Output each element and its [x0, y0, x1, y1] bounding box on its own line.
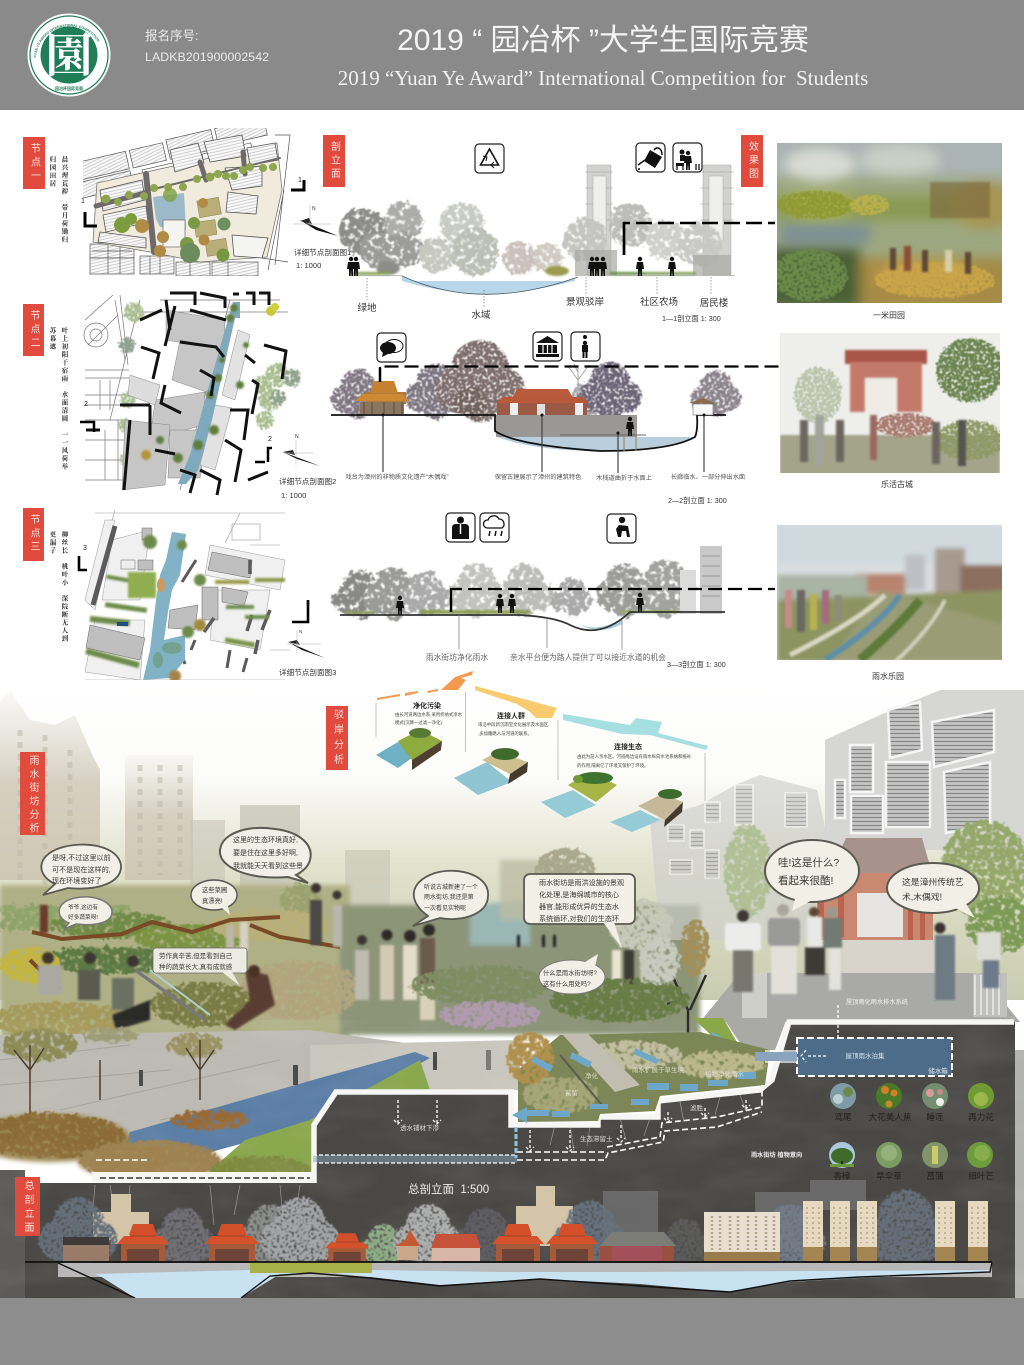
- plant: 菖蒲: [922, 1142, 948, 1168]
- dashed link: [451, 589, 775, 612]
- poem: node 1: 晨兴理荒秽 带月荷锄归: [60, 155, 70, 244]
- plant names: 睡莲: [926, 1111, 944, 1122]
- tan tower row: [803, 1201, 988, 1261]
- bubble 10: 这是漳州传统艺: [902, 876, 964, 887]
- left tree grove: [2, 1027, 223, 1120]
- crowd right: [725, 904, 1001, 1000]
- bubble 8: [539, 954, 605, 994]
- bare tree: [568, 364, 589, 395]
- labels: [357, 296, 729, 321]
- canal: [143, 532, 186, 680]
- block 4: [610, 789, 683, 832]
- right greenery: [724, 820, 1024, 953]
- icon: parent and child: [571, 332, 600, 361]
- tab: node 1: [23, 137, 45, 189]
- plant names: 大花美人蕉: [869, 1111, 912, 1122]
- pond: [153, 193, 186, 230]
- plant palette: [829, 1083, 994, 1168]
- plan caption 3: 详细节点剖面图3: [279, 667, 336, 677]
- headings: [413, 701, 642, 751]
- pavilion right: [689, 398, 716, 415]
- bubble 5: 种的蔬菜长大,真有成就感: [159, 962, 233, 971]
- bubble 4: 这些菜圃: [202, 885, 227, 894]
- plan caption 2: [279, 476, 336, 500]
- plan: node 3: [84, 510, 290, 682]
- black building lines: [86, 293, 286, 495]
- header band: [0, 0, 1024, 110]
- mid trees: [280, 848, 709, 976]
- icon: speech: [377, 333, 406, 362]
- bubble 9: 看起来很酷!: [778, 874, 833, 887]
- underground notes: 透水铺材下渗: [400, 1123, 440, 1132]
- temple A: [395, 1230, 420, 1260]
- caption: 乐活古城: [881, 479, 913, 489]
- underground notes: 生态滞留土: [580, 1134, 613, 1143]
- descriptions: 串沿中段新沉雨堂文化展示及水面区: [478, 721, 549, 728]
- bubble 1: 可不是现在这样的,: [52, 865, 111, 874]
- section 1-1: [339, 165, 775, 323]
- tab: renders: 效果图: [746, 140, 758, 182]
- section 3-3: [332, 546, 775, 669]
- descriptions: 由长河道两边水系,采用折纳式净水: [395, 711, 463, 718]
- poem: node 1: [48, 155, 70, 244]
- planting caption: 雨水街坊 植物意向: [751, 1151, 802, 1159]
- scale 1-1: 1—1剖立面 1: 300: [662, 314, 721, 323]
- cube building: [825, 690, 1024, 880]
- dark hall: [63, 1237, 109, 1261]
- underground notes: 滤胜: [690, 1103, 704, 1112]
- tab: total section: 总剖立面: [22, 1179, 34, 1236]
- plant names: 旱伞草: [876, 1170, 902, 1181]
- icon: competition logo: [28, 14, 110, 96]
- orange strip: [377, 671, 473, 700]
- block 2: [454, 748, 528, 795]
- roots: [92, 1095, 746, 1225]
- bubble 4: [191, 880, 237, 915]
- tab: section: 剖立面: [328, 140, 340, 182]
- registration number: LADKB201900002542: [145, 50, 269, 64]
- poem: node 3: 柳丝长 桃叶小 深院断无人到: [60, 530, 70, 643]
- descriptions: 模式(沉降一过滤一净化): [395, 719, 442, 726]
- grey roofs: [86, 528, 252, 660]
- foliage grey: [339, 202, 722, 276]
- water: [402, 276, 575, 294]
- cistern: 屋顶雨水泊集: [846, 1051, 885, 1060]
- bubble 6: 听说古城新建了一个: [424, 883, 478, 891]
- section markers 1: 1: [298, 177, 302, 184]
- ground and water profile: [25, 1262, 992, 1298]
- icon: competition logo: 园冶杯国际竞赛: [55, 85, 83, 91]
- water and ground: [578, 618, 622, 630]
- scale 3-3: 3—3剖立面 1: 300: [667, 660, 726, 669]
- caption: 一米田园: [873, 310, 905, 320]
- plant: 细叶芒: [967, 1142, 993, 1168]
- caption: 雨水乐园: [872, 671, 904, 681]
- plan caption 2: 详细节点剖面图2: [279, 476, 336, 486]
- descriptions: ,多加雕路人与河道的联系。: [478, 730, 532, 737]
- dark bands: [84, 526, 270, 682]
- bubble 8: 什么是雨水街坊呀?: [543, 968, 597, 977]
- poem: node 2: [48, 326, 70, 471]
- white retaining edge: [314, 1022, 1014, 1183]
- icon: compass 3: [287, 629, 325, 658]
- plan caption 3: 1: 1000: [281, 680, 306, 689]
- bubble 6: 雨水街坊,我还是第: [424, 893, 474, 901]
- garden people left: [38, 883, 648, 1030]
- headings: 连接人群: [497, 711, 525, 720]
- icon: competition logo: 園: [46, 19, 92, 86]
- section title: 总剖立面 1:500: [408, 1182, 489, 1196]
- canal greenery: [141, 304, 249, 463]
- bubble 6: 一次看见实物呢: [424, 904, 466, 912]
- blue strip: [563, 714, 708, 750]
- title: Chinese: 2019 “ 园冶杯 ”大学生国际竞赛: [397, 24, 809, 57]
- silhouettes: [347, 257, 676, 276]
- tree row: [330, 340, 741, 422]
- bubble 1: 现在环境变好了: [52, 876, 102, 885]
- temple C: [600, 1232, 676, 1261]
- bubble 7: 器官,能形成优异的生态水: [539, 902, 619, 911]
- boardwalk piles: [624, 436, 636, 451]
- ground profile: [331, 415, 726, 451]
- mist sky: [0, 680, 1024, 1000]
- line context: [84, 295, 288, 490]
- photo: 乐活古城: [780, 333, 1004, 475]
- plant names: 细叶芒: [968, 1170, 994, 1181]
- plaza left: [0, 1030, 404, 1140]
- terraced rain garden: 雨水扩展于草生境: [632, 1065, 684, 1074]
- collage: [0, 680, 1024, 1298]
- labels: 景观驳岸: [566, 297, 604, 308]
- labels: 长廊临水、一部分伸出水面: [671, 473, 745, 481]
- grey buildings: [122, 310, 250, 490]
- terraced rain garden: 净化: [585, 1071, 598, 1080]
- bubble 4: 真漂亮!: [202, 896, 223, 905]
- tab: node 1: 节点一: [28, 143, 40, 184]
- labels: 水域: [471, 309, 491, 321]
- canal: [178, 302, 240, 484]
- scale 2-2: 2—2剖立面 1: 300: [668, 496, 727, 505]
- rainwater pipe: [313, 1127, 517, 1163]
- right plaza: [700, 973, 1020, 1022]
- bottom band: [0, 1298, 1024, 1365]
- icon: competition logo: YUAN YE AWARD INTERNATIONAL COMPETITION: [34, 24, 100, 58]
- pale green trees: [118, 302, 301, 468]
- light blocks: [85, 520, 285, 680]
- labels: 社区农场: [640, 296, 678, 308]
- tab: node 2: [23, 304, 44, 356]
- tree canopies: [102, 163, 277, 263]
- plant names: 鸢尾: [834, 1111, 852, 1122]
- icon: rain cloud: [480, 513, 509, 542]
- section markers 3: 3: [306, 600, 310, 607]
- plant: 旱伞草: [876, 1142, 902, 1168]
- red halls: [117, 1224, 169, 1261]
- bubble 3: 这里的生态环境真好,: [233, 835, 298, 844]
- tab: rain street analysis: 雨水街坊分析: [27, 755, 39, 836]
- poem: node 1: 归园田居: [48, 155, 58, 188]
- icon: museum: [533, 332, 562, 361]
- yellow strip: [475, 686, 557, 718]
- mottled texture: [0, 1020, 1024, 1298]
- terraced rain garden: [506, 1032, 770, 1123]
- label: roof collection: 屋顶雨化雨水排水系统: [846, 998, 908, 1006]
- block 3: [541, 772, 617, 818]
- centre backdrop: [340, 860, 700, 1035]
- leaders: [459, 615, 622, 650]
- photo: 一米田园: [777, 143, 1002, 303]
- poem: node 3: [48, 530, 70, 643]
- bubble 2: [59, 897, 112, 929]
- bubble 7: 化处理,是海绵城市的核心: [539, 890, 619, 899]
- tab: section: [323, 135, 345, 187]
- section 2-2: [330, 340, 780, 505]
- dashed link: [624, 223, 775, 255]
- river bank grass: [0, 1108, 310, 1173]
- figures on plaza: [139, 1050, 491, 1086]
- section markers 3: [79, 545, 310, 622]
- labels: 戏台为漳州的非物质文化遗产“木偶戏”: [345, 473, 449, 481]
- descriptions: [395, 711, 692, 769]
- stone wall: [496, 415, 637, 437]
- river: [120, 1052, 430, 1160]
- icon: compass 1: N: [312, 206, 316, 212]
- icon: compass 3: N: [299, 629, 302, 634]
- terraced rain garden: 蓄留: [565, 1088, 578, 1097]
- bubble 5: 劳作真辛苦,但是看到自己: [159, 951, 233, 960]
- river bank grass base: [0, 1114, 314, 1182]
- tab: node 3: 节点三: [28, 514, 40, 554]
- icon: compass 1: [293, 205, 338, 236]
- terraced rain garden: 植物净化雨水: [705, 1069, 744, 1078]
- section markers 1: [81, 177, 304, 226]
- plant: 大花美人蕉: [876, 1083, 902, 1109]
- registration number: [145, 28, 269, 64]
- cistern: [755, 1038, 952, 1076]
- skyline: [38, 1180, 988, 1270]
- plant: 睡莲: [922, 1083, 948, 1109]
- water: [497, 437, 695, 451]
- bubble 10: 术,木偶戏!: [902, 891, 942, 902]
- mid building: [650, 775, 830, 940]
- hedges: [345, 610, 680, 614]
- white apartment: [704, 1212, 780, 1261]
- underground notes: [400, 1103, 704, 1143]
- icon: person in suit: [446, 513, 475, 542]
- dark roads: [96, 152, 280, 252]
- section markers 1: 1: [81, 198, 85, 205]
- bubble 9: 哇!这是什么?: [778, 856, 839, 869]
- tab: bank analysis: [326, 706, 348, 770]
- poem: node 2: 苏幕遮: [48, 326, 58, 351]
- registration number: 报名序号:: [145, 28, 198, 43]
- bubble 8: 这有什么用处吗?: [543, 979, 591, 988]
- plant names: [833, 1111, 994, 1181]
- bubble 3: 要是住在这里多好啊,: [233, 848, 298, 857]
- bridge: [157, 578, 165, 592]
- drainage dashes: [96, 1085, 762, 1178]
- towers: [680, 546, 722, 614]
- grey background highrises: [603, 1180, 866, 1252]
- bubble 7: 系统循环,对我们的生态环: [539, 914, 619, 923]
- labels: 绿地: [357, 302, 377, 314]
- plan caption 3: [279, 667, 336, 689]
- hedges: [85, 535, 285, 682]
- wedge by cistern: [693, 1018, 786, 1050]
- leaders: [367, 277, 711, 308]
- opera pavilion: [355, 381, 410, 414]
- cistern: 储水箱: [928, 1066, 948, 1075]
- block 1: [376, 728, 442, 770]
- plan caption 2: 1: 1000: [281, 491, 306, 500]
- left garden backdrop: [0, 885, 350, 1040]
- labels: 居民楼: [700, 297, 729, 309]
- tan towers: [93, 1186, 573, 1246]
- tab: node 2: 节点二: [28, 310, 40, 350]
- bubble 1: [41, 845, 121, 895]
- icon: family with dog: [673, 143, 702, 172]
- labels: 木栈道曲折于水面上: [596, 474, 652, 482]
- grey trees: [38, 1190, 950, 1270]
- icon: compass 2: N: [295, 434, 299, 440]
- dark ground mass: [25, 1022, 1015, 1298]
- bubble 10: [887, 863, 979, 918]
- plant: 鸢尾: [830, 1083, 856, 1109]
- centre planting foreground: [410, 935, 690, 1029]
- labels: 保留古建展示了漳州的建筑特色: [495, 473, 581, 481]
- parcel base: [93, 143, 282, 262]
- plant: 再力花: [968, 1083, 994, 1109]
- bubble 6: [413, 871, 488, 926]
- headings: 净化污染: [413, 701, 441, 710]
- section markers 2: 2: [84, 401, 88, 408]
- tree: right central: [667, 975, 706, 1040]
- dividers: [376, 692, 705, 801]
- green verge: [205, 1060, 430, 1180]
- tab: bank analysis: 驳岸分析: [332, 709, 344, 769]
- tab: node 3: [23, 508, 44, 561]
- vegetable beds: [0, 905, 360, 1038]
- section markers 2: [80, 401, 272, 462]
- bubble 1: 是呀,不过这里以前: [52, 853, 111, 862]
- icon: sitting person: [607, 514, 636, 543]
- plant names: 菖蒲: [926, 1170, 944, 1181]
- plan caption 1: 详细节点剖面图1: [294, 247, 351, 257]
- white strip below river: [92, 1172, 314, 1183]
- shrubs: [350, 261, 696, 276]
- tab: renders: [741, 135, 763, 187]
- tab: rain street analysis: [20, 752, 45, 836]
- labels: [345, 473, 745, 482]
- poem: node 3: 更漏子: [48, 530, 58, 555]
- bubble 9: [765, 840, 859, 911]
- labels: [426, 652, 666, 662]
- plan caption 1: [294, 247, 351, 270]
- speech bubbles: [41, 828, 979, 994]
- descriptions: 的作用,隔离亿了环境又保护了环境。: [577, 762, 648, 769]
- plan caption 1: 1: 1000: [296, 261, 321, 270]
- section markers 2: 2: [268, 436, 272, 443]
- bubble 2: 爷爷,这边有: [68, 903, 98, 911]
- temple B: [431, 1234, 481, 1261]
- soil edging: [30, 917, 340, 990]
- bubble 7: 雨水街坊是雨洪设施的景观: [539, 878, 624, 887]
- poem: node 2: 叶上初阳干宿雨 水面清圆 一一风荷举: [60, 326, 70, 471]
- plant names: 香樟: [833, 1170, 851, 1181]
- towers: [585, 165, 734, 275]
- descriptions: 由此为游人亲水区。河道两边设有雨水纵向水池系纳和植补: [577, 753, 692, 760]
- bubble 3: [220, 828, 311, 883]
- down arrows: [394, 1005, 842, 1151]
- icon: recycle: [475, 144, 504, 173]
- plan: node 2: [84, 293, 301, 495]
- bubble 2: 好多蔬菜呀!: [68, 913, 98, 921]
- bubble 5: [153, 948, 247, 986]
- title: English: 2019 “Yuan Ye Award” International Competition for Students: [338, 66, 868, 90]
- temple: [497, 389, 588, 415]
- hatch building blocks: [98, 135, 278, 258]
- plant: 香樟: [829, 1142, 855, 1168]
- plant names: 再力花: [968, 1111, 994, 1122]
- bubble 3: 我就能天天看到这些景: [233, 861, 303, 870]
- plan: node 1: [83, 128, 290, 276]
- left towers: [0, 690, 390, 910]
- icon: watering can: [636, 143, 665, 172]
- dashed link: [380, 366, 780, 382]
- labels: 雨水街坊净化雨水: [426, 652, 488, 662]
- section markers 3: 3: [83, 545, 87, 552]
- labels: 亲水平台便为路人提供了可以接近水道的机会: [510, 652, 666, 662]
- headings: 连接生态: [614, 742, 642, 751]
- bubble 7: [524, 874, 635, 948]
- fields: [194, 197, 228, 256]
- right temple: [817, 838, 937, 973]
- photo: 雨水乐园: [777, 525, 1005, 662]
- bank analysis diagrams: [376, 671, 708, 832]
- tab: total section: [15, 1177, 40, 1236]
- leaders: [383, 415, 704, 473]
- icon: compass 2: [283, 434, 320, 466]
